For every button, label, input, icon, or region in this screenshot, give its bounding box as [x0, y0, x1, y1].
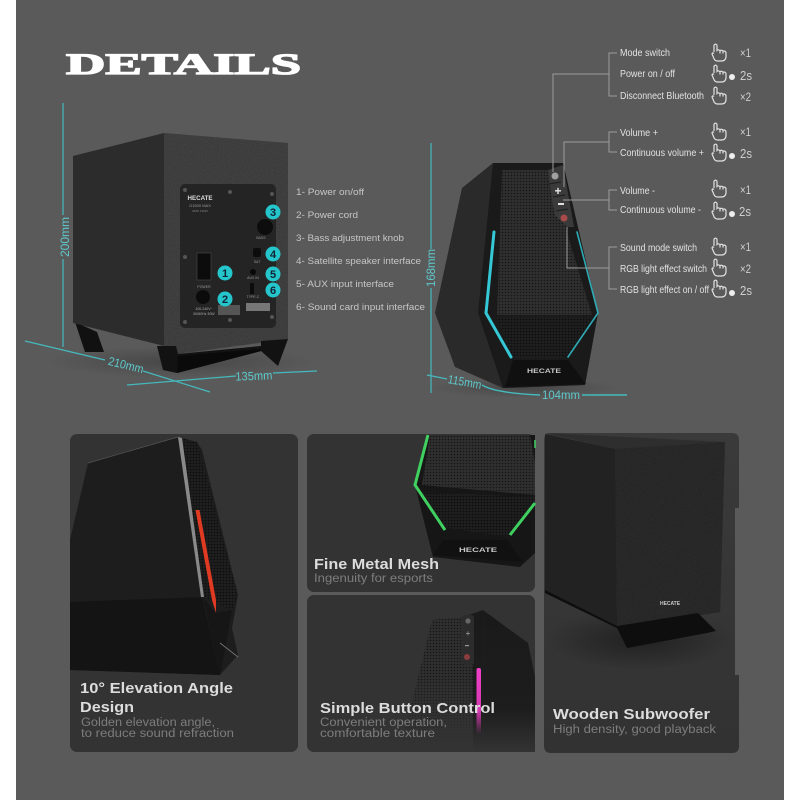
panel: elevation angle: to reduce sound refraction	[81, 728, 234, 740]
control: volume up: ×1	[740, 125, 751, 139]
numbered markers	[218, 204, 280, 306]
speaker top view	[400, 610, 535, 752]
connector panel: G1500 MAX	[189, 203, 211, 208]
connector panel: SAT	[254, 260, 261, 264]
connector lines	[553, 53, 617, 289]
panel: simple button control: Simple Button Control	[320, 700, 495, 717]
connector panel: HECATE	[188, 196, 212, 202]
satellite dimensions: 168mm	[424, 249, 438, 287]
panel: simple button control	[307, 595, 535, 752]
numbered markers: 4	[270, 249, 277, 261]
control: volume down: Volume -	[620, 185, 655, 197]
control: disconnect bluetooth: Disconnect Bluetooth	[620, 90, 704, 102]
control: continuous volume down	[620, 202, 751, 219]
control buttons: +	[554, 184, 562, 198]
subwoofer product shot: HECATE	[660, 601, 681, 607]
subwoofer product shot	[545, 433, 735, 670]
control: continuous volume down: Continuous volume -	[620, 204, 701, 216]
panel: wooden subwoofer	[544, 433, 739, 753]
panel: wooden subwoofer: High density, good playback	[553, 724, 716, 736]
connector panel: AUX IN	[247, 276, 259, 280]
interface legend	[296, 187, 425, 313]
numbered markers: 1	[222, 268, 228, 280]
control: mode switch: Mode switch	[620, 47, 670, 59]
control: volume up	[620, 123, 751, 140]
control: sound mode switch: Sound mode switch	[620, 242, 697, 254]
control: volume down	[620, 180, 751, 197]
control: disconnect bluetooth	[620, 87, 751, 104]
speaker side view	[70, 437, 238, 675]
numbered markers: 5	[270, 269, 276, 281]
panel: simple button control: Convenient operation,	[320, 717, 447, 729]
numbered markers: 2	[222, 294, 228, 306]
panel: elevation angle	[70, 434, 298, 752]
control: volume up: Volume +	[620, 127, 658, 139]
panel: elevation angle: Golden elevation angle,	[81, 717, 215, 729]
control: sound mode switch	[620, 238, 751, 255]
satellite speaker front view: HECATE	[527, 369, 561, 375]
control: rgb light effect switch: RGB light effect switch	[620, 263, 707, 275]
control: mode switch	[620, 44, 751, 61]
panel: simple button control: comfortable texture	[320, 728, 435, 740]
panel: wooden subwoofer: Wooden Subwoofer	[553, 706, 710, 723]
control: volume down: ×1	[740, 183, 751, 197]
control: rgb light effect switch	[620, 259, 751, 276]
panel: elevation angle: Design	[80, 699, 134, 716]
control: rgb light effect on/off	[620, 280, 752, 298]
interface legend: 4- Satellite speaker interface	[296, 256, 421, 267]
numbered markers: 6	[270, 285, 276, 297]
interface legend: 3- Bass adjustment knob	[296, 233, 404, 244]
speaker top view: +	[466, 629, 471, 638]
panel: fine metal mesh: Ingenuity for esports	[314, 573, 433, 585]
control: rgb light effect on/off: 2s	[740, 283, 752, 298]
control: power on/off: 2s	[740, 68, 752, 83]
control: mode switch: ×1	[740, 46, 751, 60]
subwoofer dimensions: 135mm	[235, 368, 273, 384]
interface legend: 1- Power on/off	[296, 187, 364, 198]
satellite dimensions: 104mm	[542, 388, 580, 402]
satellite speaker front view	[430, 163, 620, 398]
numbered markers: 3	[270, 207, 276, 219]
control: continuous volume up: Continuous volume +	[620, 147, 704, 159]
control: rgb light effect switch: ×2	[740, 262, 751, 276]
speaker close-up	[415, 435, 535, 567]
control: power on/off	[620, 65, 752, 83]
panel: fine metal mesh: Fine Metal Mesh	[314, 556, 439, 573]
speaker close-up: HECATE	[459, 548, 497, 554]
control: disconnect bluetooth: ×2	[740, 90, 751, 104]
control: sound mode switch: ×1	[740, 240, 751, 254]
title: DETAILS	[66, 48, 301, 81]
connector panel: 50/60Hz 30W	[193, 312, 215, 316]
connector panel: POWER	[197, 285, 211, 289]
interface legend: 5- AUX input interface	[296, 279, 394, 290]
control buttons	[548, 165, 574, 227]
connector panel: RMS 130W	[192, 209, 208, 213]
subwoofer rear view	[45, 133, 315, 378]
control: continuous volume up	[620, 144, 752, 161]
control: continuous volume down: 2s	[739, 204, 751, 219]
control: rgb light effect on/off: RGB light effect on / off	[620, 284, 709, 296]
control: power on/off: Power on / off	[620, 68, 675, 80]
interface legend: 6- Sound card input interface	[296, 302, 425, 313]
cyan light strips	[486, 232, 598, 357]
interface legend: 2- Power cord	[296, 210, 358, 221]
subwoofer dimensions: 200mm	[58, 217, 72, 257]
control: continuous volume up: 2s	[740, 146, 752, 161]
connector panel	[180, 184, 276, 328]
connector panel: 100-240V~	[195, 307, 213, 311]
connector panel: BASS	[256, 236, 266, 240]
satellite dimensions	[424, 143, 627, 402]
satellite dimensions: 115mm	[447, 372, 483, 392]
panel: elevation angle: 10° Elevation Angle	[80, 680, 233, 697]
subwoofer dimensions	[25, 103, 317, 392]
connector panel: TYPE-C	[247, 295, 260, 299]
panel: fine metal mesh	[307, 434, 535, 592]
subwoofer dimensions: 210mm	[107, 354, 145, 376]
